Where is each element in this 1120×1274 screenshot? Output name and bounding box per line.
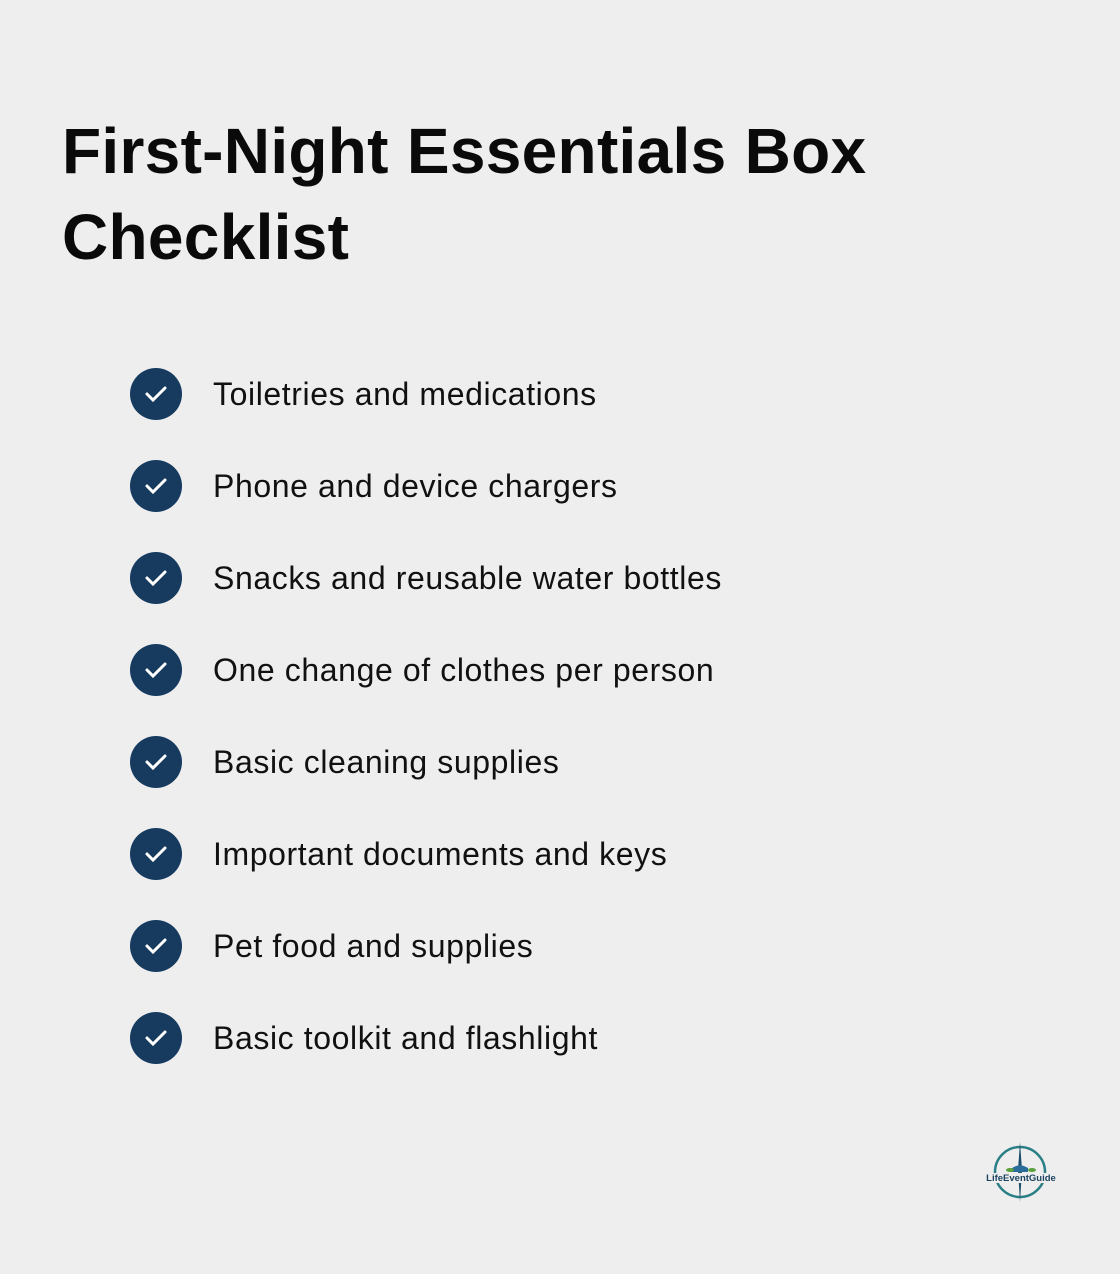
item 6	[130, 828, 667, 880]
item 5: Basic cleaning supplies	[213, 744, 559, 780]
title: Checklist	[62, 201, 349, 273]
item 5	[130, 736, 559, 788]
checklist	[130, 368, 722, 1064]
title	[62, 115, 866, 273]
item 1: Toiletries and medications	[213, 376, 597, 412]
item 4	[130, 644, 714, 696]
item 6: Important documents and keys	[213, 836, 667, 872]
item 2	[130, 460, 618, 512]
title: First-Night Essentials Box	[62, 115, 866, 187]
logo	[986, 1142, 1056, 1202]
item 4: One change of clothes per person	[213, 652, 714, 688]
item 3: Snacks and reusable water bottles	[213, 560, 722, 596]
item 3	[130, 552, 722, 604]
item 8: Basic toolkit and flashlight	[213, 1020, 598, 1056]
item 7	[130, 920, 533, 972]
item 2: Phone and device chargers	[213, 468, 618, 504]
item 1	[130, 368, 597, 420]
logo: LifeEventGuide	[986, 1173, 1056, 1184]
item 7: Pet food and supplies	[213, 928, 533, 964]
item 8	[130, 1012, 598, 1064]
